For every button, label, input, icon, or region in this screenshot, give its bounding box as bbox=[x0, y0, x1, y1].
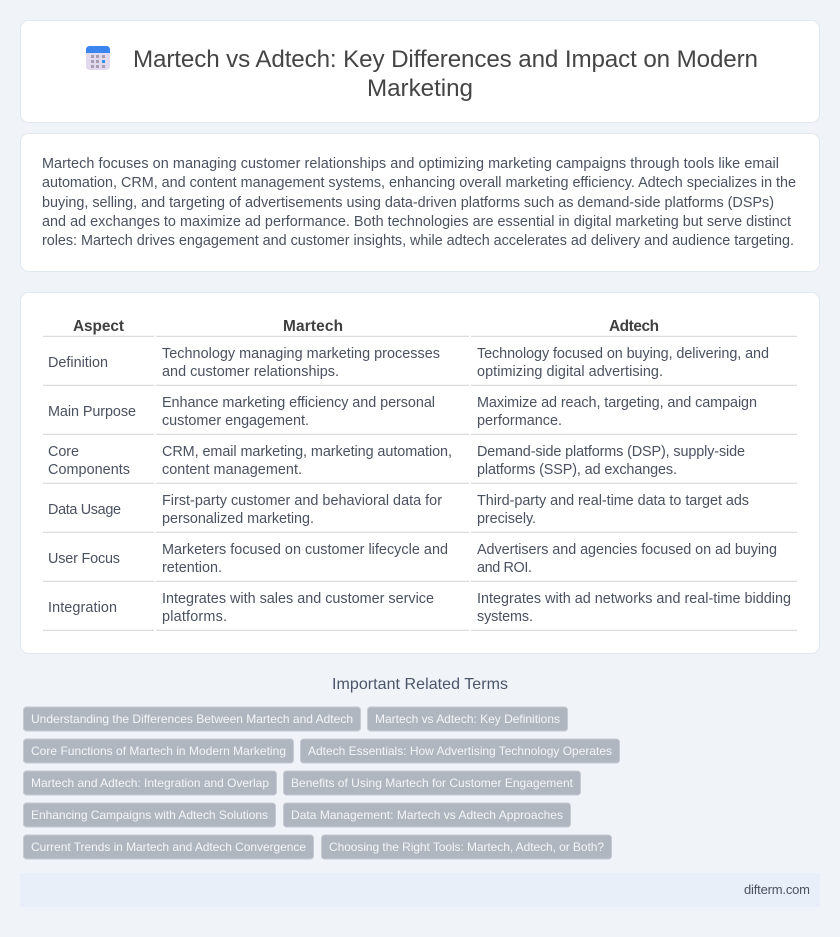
panel: intro paragraph bbox=[20, 134, 820, 272]
title bbox=[133, 46, 758, 102]
row: Integration: Integrates with ad networks and real-time bidding bbox=[477, 591, 791, 607]
footer bar: difterm.com bbox=[744, 882, 810, 897]
tag bbox=[24, 803, 276, 827]
tag: Understanding the Differences Between Martech and Adtech bbox=[31, 712, 353, 726]
tag: Martech vs Adtech: Key Definitions bbox=[375, 712, 560, 726]
row: User Focus: User Focus bbox=[48, 551, 120, 567]
row: Core Components: Demand-side platforms (DSP), supply-side bbox=[477, 444, 745, 460]
tag: Current Trends in Martech and Adtech Convergence bbox=[31, 840, 306, 854]
title: Marketing bbox=[367, 75, 473, 102]
tag bbox=[284, 803, 570, 827]
row: Definition: Technology managing marketing processes bbox=[162, 346, 440, 362]
tag: Choosing the Right Tools: Martech, Adtech, or Both? bbox=[329, 840, 604, 854]
tag bbox=[24, 707, 360, 731]
panel: comparison table bbox=[20, 292, 820, 654]
row: Integration: Integrates with sales and customer service bbox=[162, 591, 434, 607]
intro text: Martech focuses on managing customer relationships and optimizing marketing campaigns through tools like email bbox=[42, 156, 779, 172]
table header: Martech bbox=[283, 318, 343, 335]
panel: title card bbox=[20, 20, 820, 122]
footer bar bbox=[20, 873, 820, 907]
table header: Adtech bbox=[609, 318, 659, 335]
row: Core Components: content management. bbox=[162, 462, 302, 478]
tag: Benefits of Using Martech for Customer Engagement bbox=[291, 776, 574, 790]
tag bbox=[368, 707, 568, 731]
row: Core Components: CRM, email marketing, marketing automation, bbox=[162, 444, 452, 460]
row: Definition: Definition bbox=[48, 355, 108, 371]
tag bbox=[284, 771, 580, 795]
tag: Enhancing Campaigns with Adtech Solutions bbox=[31, 808, 268, 822]
row: User Focus: and ROI. bbox=[477, 560, 532, 576]
row: Integration: Integration bbox=[48, 600, 117, 616]
row: User Focus: Advertisers and agencies focused on ad buying bbox=[477, 542, 777, 558]
intro text: buying, selling, and targeting of advertisements using data-driven platforms such as demand-side platforms (DSPs) bbox=[42, 195, 774, 211]
row: Core Components: Core bbox=[48, 444, 79, 460]
row: User Focus bbox=[48, 542, 777, 576]
tag: Core Functions of Martech in Modern Marketing bbox=[31, 744, 286, 758]
row: Definition: optimizing digital advertising. bbox=[477, 364, 663, 380]
tag bbox=[24, 835, 314, 859]
intro text: roles: Martech drives engagement and customer insights, while adtech accelerates ad delivery and audience targeting. bbox=[42, 233, 794, 249]
table header bbox=[73, 318, 659, 335]
icon: calendar bbox=[86, 46, 110, 70]
row: Main Purpose bbox=[48, 395, 757, 429]
row: Data Usage: personalized marketing. bbox=[162, 511, 314, 527]
tag: Adtech Essentials: How Advertising Technology Operates bbox=[308, 744, 612, 758]
tag: Martech and Adtech: Integration and Overlap bbox=[31, 776, 269, 790]
tag bbox=[300, 739, 620, 763]
intro text: and ad exchanges to maximize ad performance. Both technologies are essential in digital marketing but serve distinct bbox=[42, 214, 791, 230]
row: Data Usage: Data Usage bbox=[48, 502, 121, 518]
tag bbox=[24, 771, 276, 795]
row: Definition bbox=[48, 346, 769, 380]
row: Definition: Technology focused on buying, delivering, and bbox=[477, 346, 769, 362]
related term tags bbox=[24, 707, 620, 859]
row: Integration: platforms. bbox=[162, 609, 227, 625]
intro text bbox=[42, 156, 796, 249]
row: Core Components: Components bbox=[48, 462, 130, 478]
row: Integration bbox=[48, 591, 791, 625]
row: Definition: and customer relationships. bbox=[162, 364, 339, 380]
row: Main Purpose: customer engagement. bbox=[162, 413, 309, 429]
table header: Aspect bbox=[73, 318, 124, 335]
row: Data Usage: First-party customer and behavioral data for bbox=[162, 493, 442, 509]
row: Integration: systems. bbox=[477, 609, 533, 625]
heading: Important Related Terms: Important Related Terms bbox=[332, 676, 508, 693]
tag bbox=[322, 835, 612, 859]
tag bbox=[24, 739, 294, 763]
row: Main Purpose: Enhance marketing efficiency and personal bbox=[162, 395, 435, 411]
intro text: automation, CRM, and content management systems, enhancing overall marketing efficiency. Adtech specializes in the bbox=[42, 175, 796, 191]
row: Main Purpose: performance. bbox=[477, 413, 562, 429]
row: Main Purpose: Main Purpose bbox=[48, 404, 136, 420]
row: Core Components bbox=[48, 444, 745, 478]
row: Core Components: platforms (SSP), ad exchanges. bbox=[477, 462, 677, 478]
row: Main Purpose: Maximize ad reach, targeting, and campaign bbox=[477, 395, 757, 411]
row: User Focus: Marketers focused on customer lifecycle and bbox=[162, 542, 448, 558]
tag: Data Management: Martech vs Adtech Approaches bbox=[291, 808, 563, 822]
row: Data Usage: precisely. bbox=[477, 511, 536, 527]
row: Data Usage: Third-party and real-time data to target ads bbox=[477, 493, 749, 509]
row: Data Usage bbox=[48, 493, 749, 527]
title: Martech vs Adtech: Key Differences and Impact on Modern bbox=[133, 46, 758, 73]
row: User Focus: retention. bbox=[162, 560, 222, 576]
